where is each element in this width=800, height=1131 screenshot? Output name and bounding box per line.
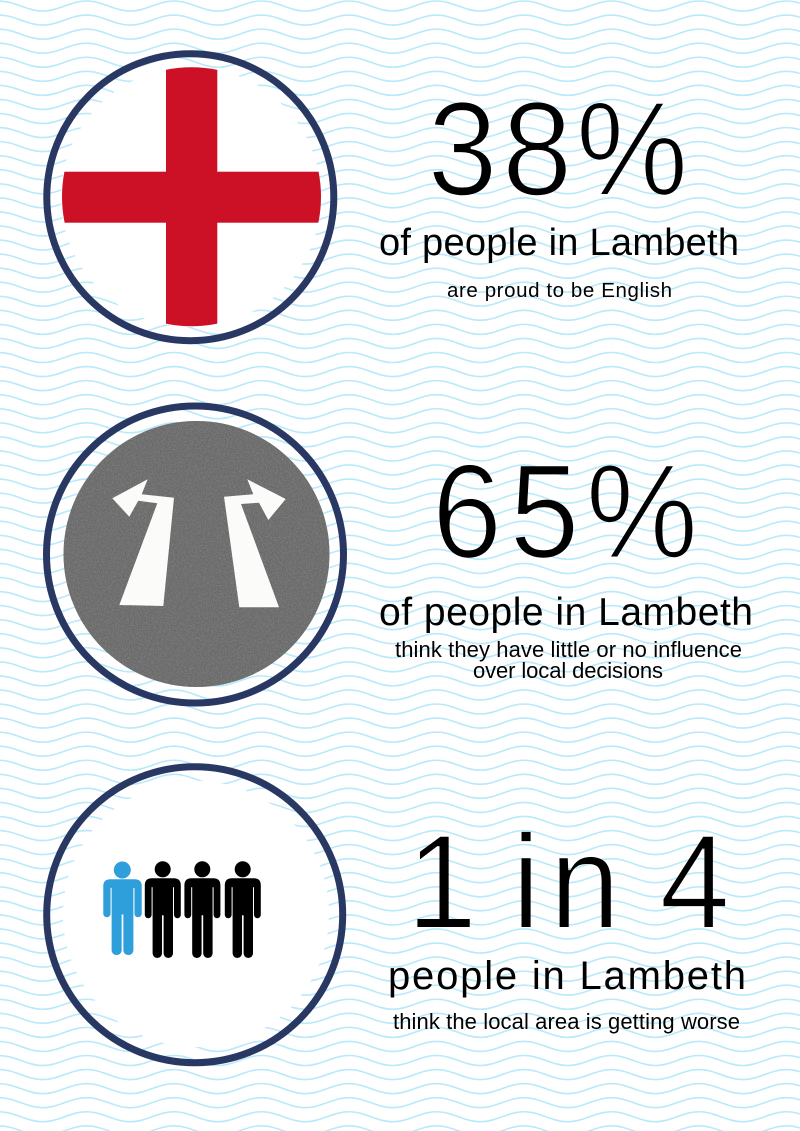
statistic: 1 in 4 [407,806,730,957]
subheading: of people in Lambeth [379,222,739,264]
icon: four people in ring [47,767,343,1063]
statistic: 1 in 4: 1 [407,806,477,957]
panel: proud to be English [47,54,739,341]
panel: influence over local decisions [46,406,753,703]
black people [145,861,261,958]
blue person [103,862,142,955]
subheading: of people in Lambeth [379,591,753,634]
statistic: 65%: 65% [432,436,698,586]
left arrow [112,479,174,606]
caption: over local decisions [473,658,663,683]
subheading: people in Lambeth [388,954,746,998]
caption: are proud to be English [447,279,672,302]
caption [395,637,742,683]
statistic: 1 in 4: 4 [660,806,730,957]
caption: think they have little or no influence [395,637,742,662]
statistic: 38%: 38% [428,73,688,224]
icon: road arrows in ring [46,406,344,703]
statistic: 1 in 4: in [512,806,620,957]
panel: local area getting worse [47,767,746,1063]
icon: England flag in ring [47,54,334,341]
caption: think the local area is getting worse [393,1009,740,1034]
right arrow [224,479,286,607]
